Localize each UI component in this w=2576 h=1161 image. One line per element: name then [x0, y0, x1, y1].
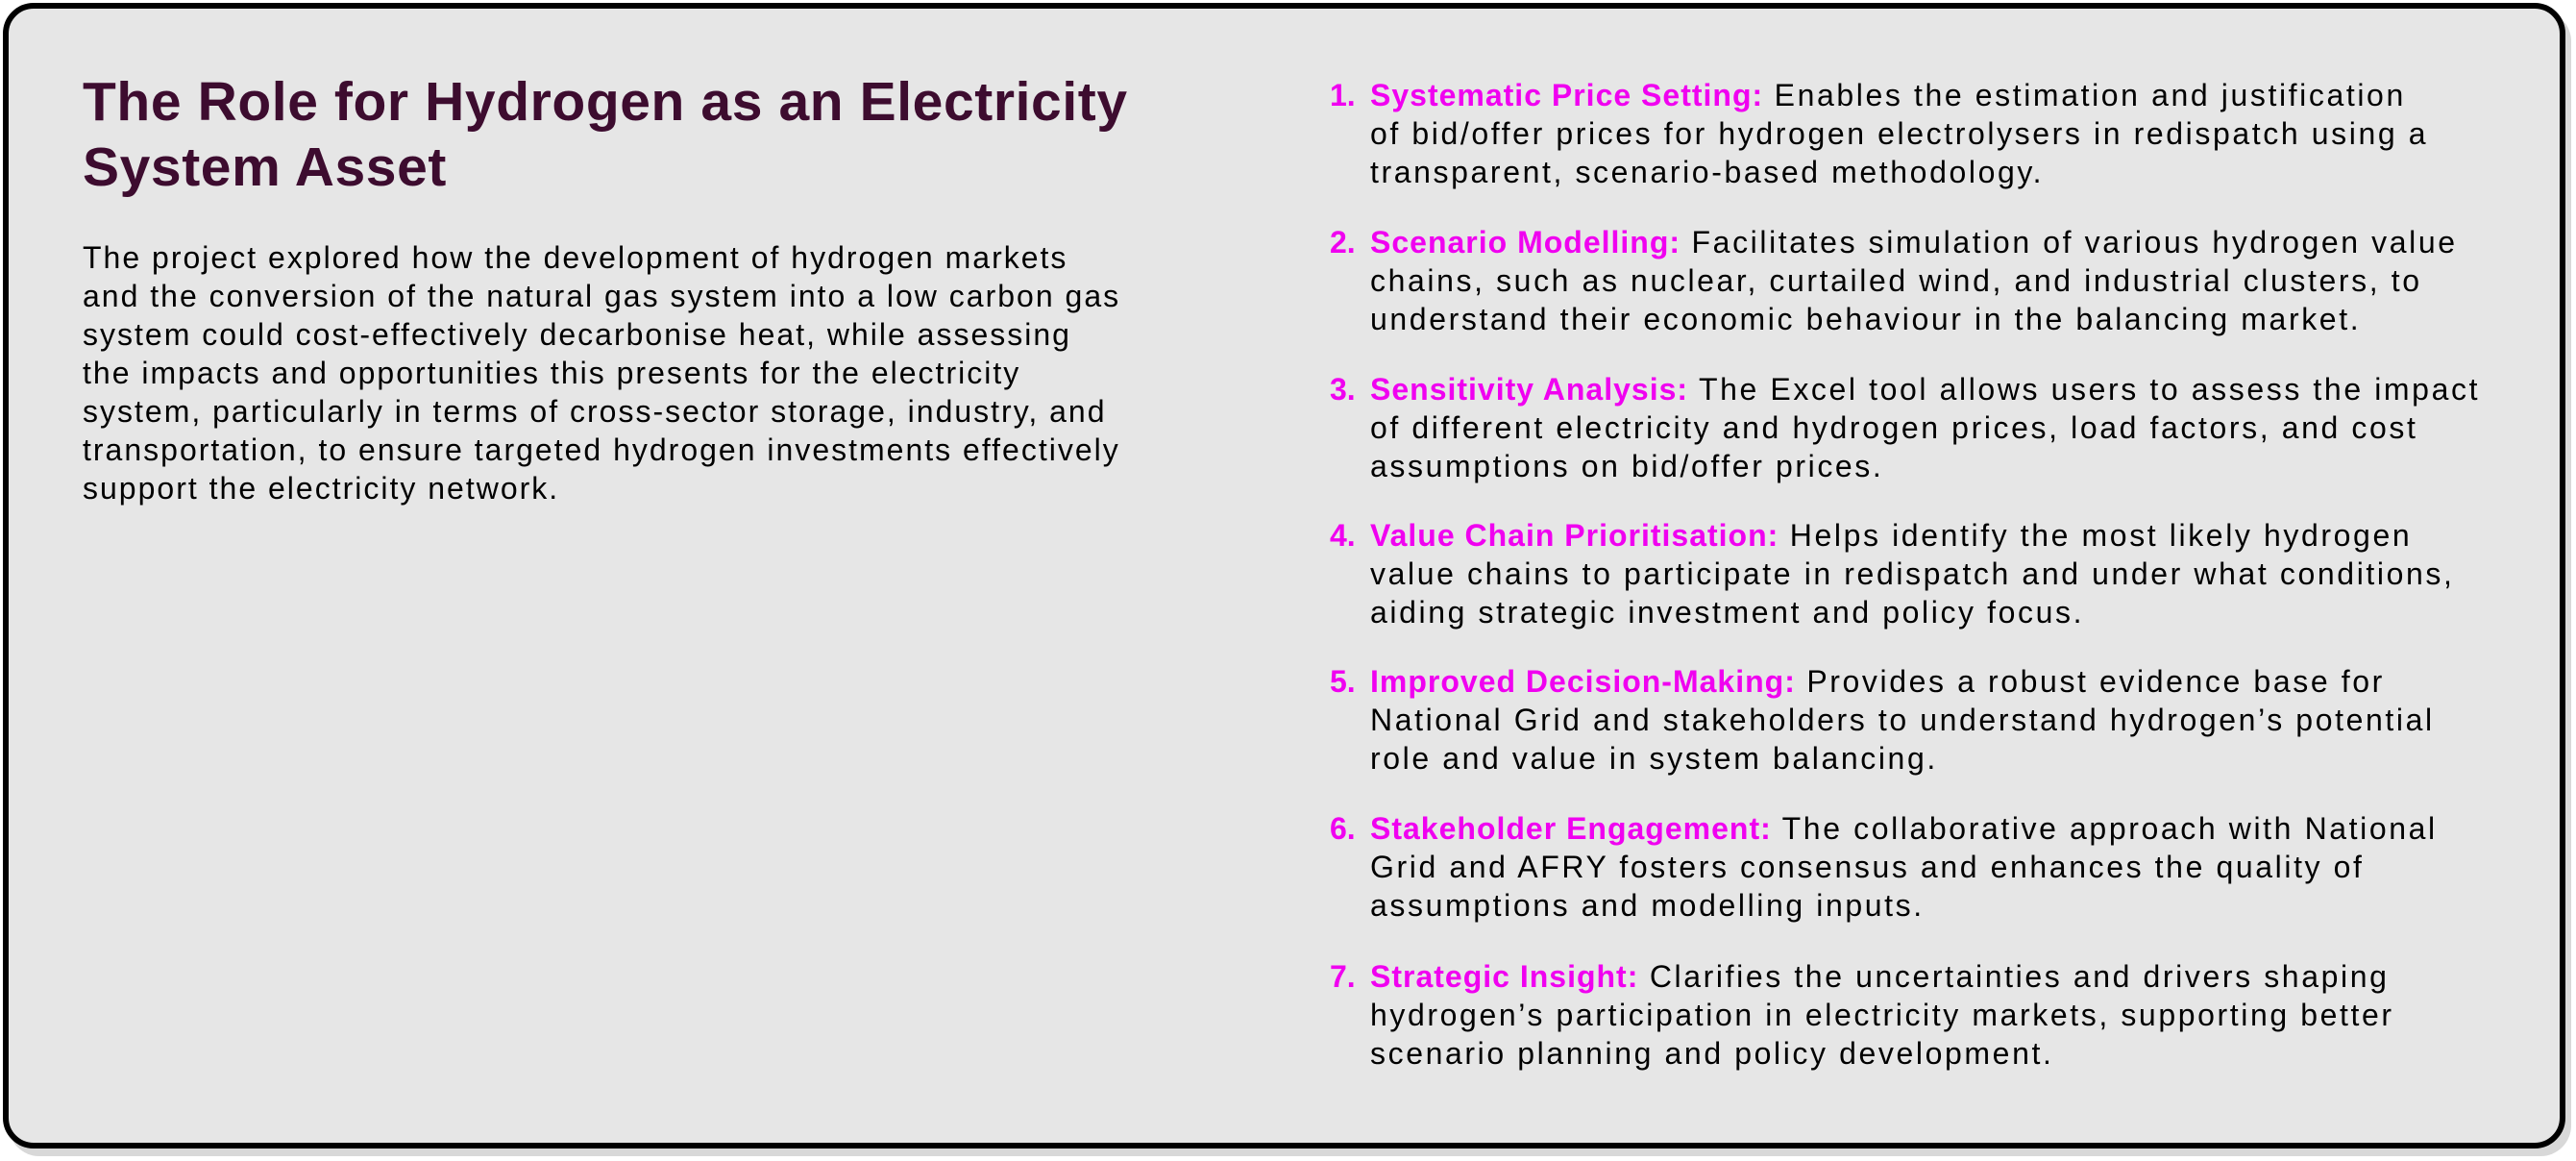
list item 5: 5.: [1330, 664, 1356, 699]
list item 2: Scenario Modelling: Facilitates simulation of various hydrogen value: [1370, 225, 2458, 259]
list item 5: Improved Decision-Making: Provides a robust evidence base for: [1370, 664, 2385, 699]
text block: intro paragraph: [83, 240, 1120, 506]
list item 1: Systematic Price Setting: Enables the estimation and justification: [1370, 78, 2406, 112]
list item 6: Stakeholder Engagement: The collaborative approach with National: [1370, 811, 2438, 846]
list item 7: Strategic Insight: Clarifies the uncertainties and drivers shaping: [1370, 959, 2390, 994]
text block: intro paragraph: the impacts and opportunities this presents for the electricity: [83, 356, 1020, 390]
text block: intro paragraph: system could cost-effectively decarbonise heat, while assessing: [83, 317, 1071, 352]
text block: intro paragraph: The project explored how the development of hydrogen markets: [83, 240, 1067, 275]
list item 1: 1.: [1330, 78, 1356, 112]
list item 3: assumptions on bid/offer prices.: [1370, 449, 1883, 483]
list item 6: assumptions and modelling inputs.: [1370, 888, 1925, 923]
list item 4: aiding strategic investment and policy focus.: [1370, 595, 2084, 630]
list item 3: of different electricity and hydrogen prices, load factors, and cost: [1370, 410, 2417, 445]
list item 6: [1330, 811, 2438, 923]
text block: intro paragraph: system, particularly in terms of cross-sector storage, industry, and: [83, 394, 1107, 429]
title: System Asset: [83, 136, 447, 198]
list item 5: [1330, 664, 2435, 776]
list item 2: chains, such as nuclear, curtailed wind, and industrial clusters, to: [1370, 263, 2422, 298]
list item 1: transparent, scenario-based methodology.: [1370, 155, 2044, 189]
list item 4: Value Chain Prioritisation: Helps identify the most likely hydrogen: [1370, 518, 2412, 553]
text block: intro paragraph: transportation, to ensure targeted hydrogen investments effectively: [83, 432, 1120, 467]
title: [83, 71, 1128, 198]
list item 7: [1330, 959, 2394, 1071]
list item 5: National Grid and stakeholders to understand hydrogen’s potential: [1370, 703, 2435, 737]
title: The Role for Hydrogen as an Electricity: [83, 71, 1128, 133]
list item 1: of bid/offer prices for hydrogen electrolysers in redispatch using a: [1370, 116, 2428, 151]
list item 7: 7.: [1330, 959, 1356, 994]
list item 2: 2.: [1330, 225, 1356, 259]
list item 4: value chains to participate in redispatch and under what conditions,: [1370, 556, 2455, 591]
list item 4: 4.: [1330, 518, 1356, 553]
list item 4: [1330, 518, 2455, 630]
list item 1: [1330, 78, 2428, 189]
list item 5: role and value in system balancing.: [1370, 741, 1938, 776]
list item 3: [1330, 372, 2480, 483]
list item 6: 6.: [1330, 811, 1356, 846]
list item 7: scenario planning and policy development.: [1370, 1036, 2053, 1071]
list item 7: hydrogen’s participation in electricity markets, supporting better: [1370, 998, 2394, 1032]
list item 2: [1330, 225, 2458, 336]
list item 2: understand their economic behaviour in the balancing market.: [1370, 302, 2361, 336]
list item 3: 3.: [1330, 372, 1356, 407]
list item 6: Grid and AFRY fosters consensus and enhances the quality of: [1370, 850, 2365, 884]
list item 3: Sensitivity Analysis: The Excel tool allows users to assess the impact: [1370, 372, 2480, 407]
text block: intro paragraph: support the electricity network.: [83, 471, 559, 506]
text block: intro paragraph: and the conversion of the natural gas system into a low carbon gas: [83, 279, 1120, 313]
